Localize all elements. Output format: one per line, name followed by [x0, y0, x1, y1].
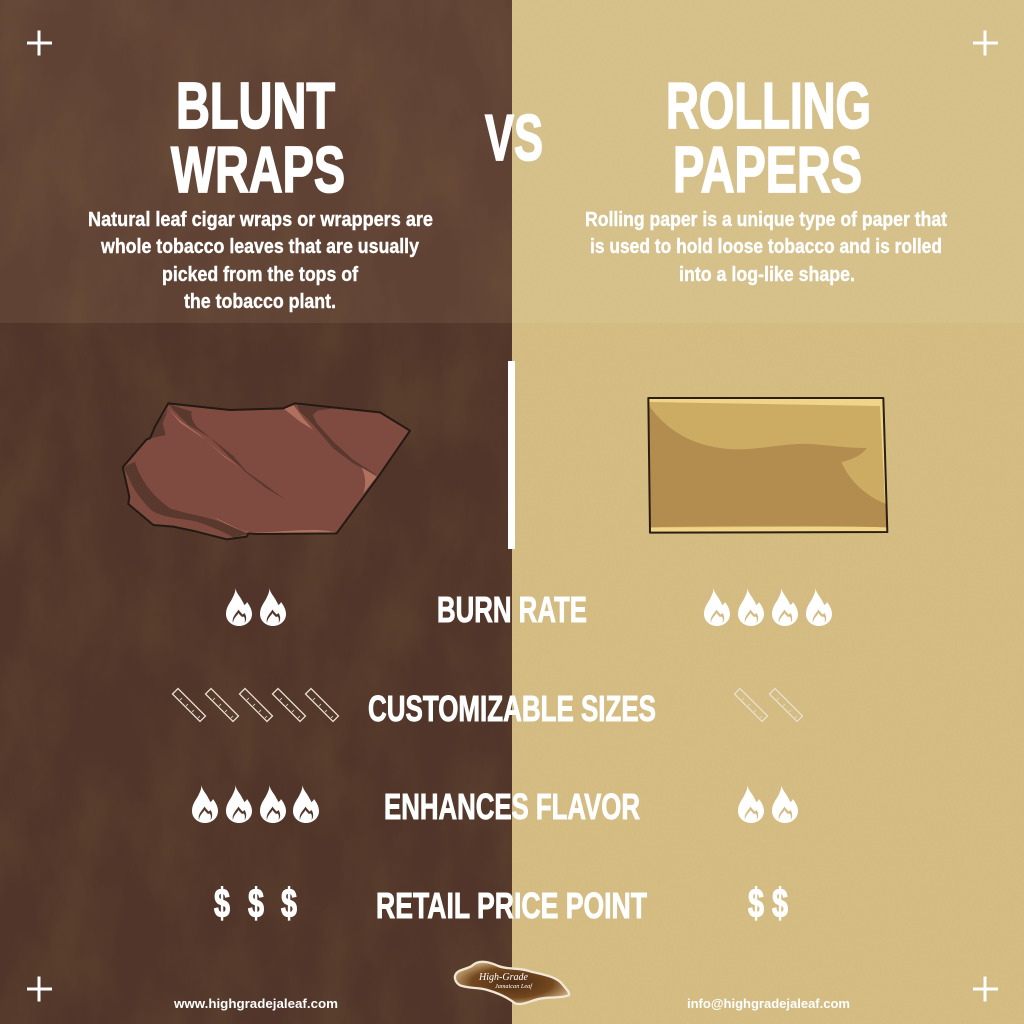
description: blunt wraps: the tobacco plant.	[184, 291, 336, 313]
description: rolling papers	[585, 209, 947, 286]
description: blunt wraps: whole tobacco leaves that are usually	[100, 236, 420, 258]
label: enhances flavor: ENHANCES FLAVOR	[384, 786, 640, 827]
description: blunt wraps: Natural leaf cigar wraps or wrappers are	[88, 209, 433, 231]
description: rolling papers: is used to hold loose tobacco and is rolled	[590, 236, 942, 258]
background: left leather panel	[0, 0, 512, 1024]
logo: High-Grade Jamaican Leaf: Jamaican Leaf	[495, 983, 533, 990]
label: burn rate: BURN RATE	[437, 589, 587, 630]
row: customizable sizes	[172, 688, 802, 729]
rating: blunt price: $	[214, 880, 230, 926]
row: enhances flavor	[192, 785, 798, 827]
rating: blunt price: $	[281, 880, 297, 926]
center divider	[508, 361, 515, 549]
description: blunt wraps: picked from the tops of	[162, 264, 358, 286]
corner mark: top left	[27, 30, 52, 56]
label: retail price point: RETAIL PRICE POINT	[376, 885, 647, 926]
title: Rolling Papers: ROLLING	[666, 69, 871, 142]
rating: rolling paper price	[748, 880, 788, 926]
header band: right	[512, 0, 1024, 323]
header band: left	[0, 0, 512, 323]
footer: website: www.highgradejaleaf.com	[173, 996, 338, 1011]
logo: High-Grade Jamaican Leaf	[455, 962, 569, 1004]
logo: High-Grade Jamaican Leaf: High-Grade	[478, 971, 528, 983]
rating: rolling paper flavor flames	[738, 785, 798, 823]
rating: rolling paper burn rate flames	[704, 588, 832, 626]
rating: blunt burn rate flames	[226, 588, 286, 626]
label: customizable sizes: CUSTOMIZABLE SIZES	[368, 688, 656, 729]
rating: rolling paper size rulers	[734, 688, 802, 722]
title: VS: VS	[485, 101, 543, 174]
illustration: rolling paper sheet	[648, 398, 887, 533]
corner mark: bottom left	[27, 976, 52, 1002]
rating: blunt flavor flames	[192, 785, 319, 823]
row: burn rate	[226, 588, 832, 630]
corner mark: bottom right	[973, 976, 998, 1002]
description: rolling papers: Rolling paper is a unique type of paper that	[585, 209, 947, 231]
title: Rolling Papers	[666, 69, 871, 206]
title: Blunt Wraps: BLUNT	[176, 69, 335, 142]
corner mark: top right	[973, 30, 998, 56]
title: Blunt Wraps	[171, 69, 345, 206]
title: Blunt Wraps: WRAPS	[171, 133, 345, 206]
row: retail price point	[214, 880, 788, 926]
description: rolling papers: into a log-like shape.	[679, 264, 855, 286]
rating: rolling paper price: $	[748, 880, 764, 926]
rating: blunt price	[214, 880, 297, 926]
title: Rolling Papers: PAPERS	[673, 133, 862, 206]
rating: blunt size rulers	[172, 688, 338, 722]
rating: blunt price: $	[248, 880, 264, 926]
illustration: tobacco leaf wrap	[123, 403, 410, 539]
rating: rolling paper price: $	[772, 880, 788, 926]
footer: email: info@highgradejaleaf.com	[687, 996, 850, 1011]
background: right kraft paper panel	[512, 0, 1024, 1024]
description: blunt wraps	[88, 209, 433, 313]
